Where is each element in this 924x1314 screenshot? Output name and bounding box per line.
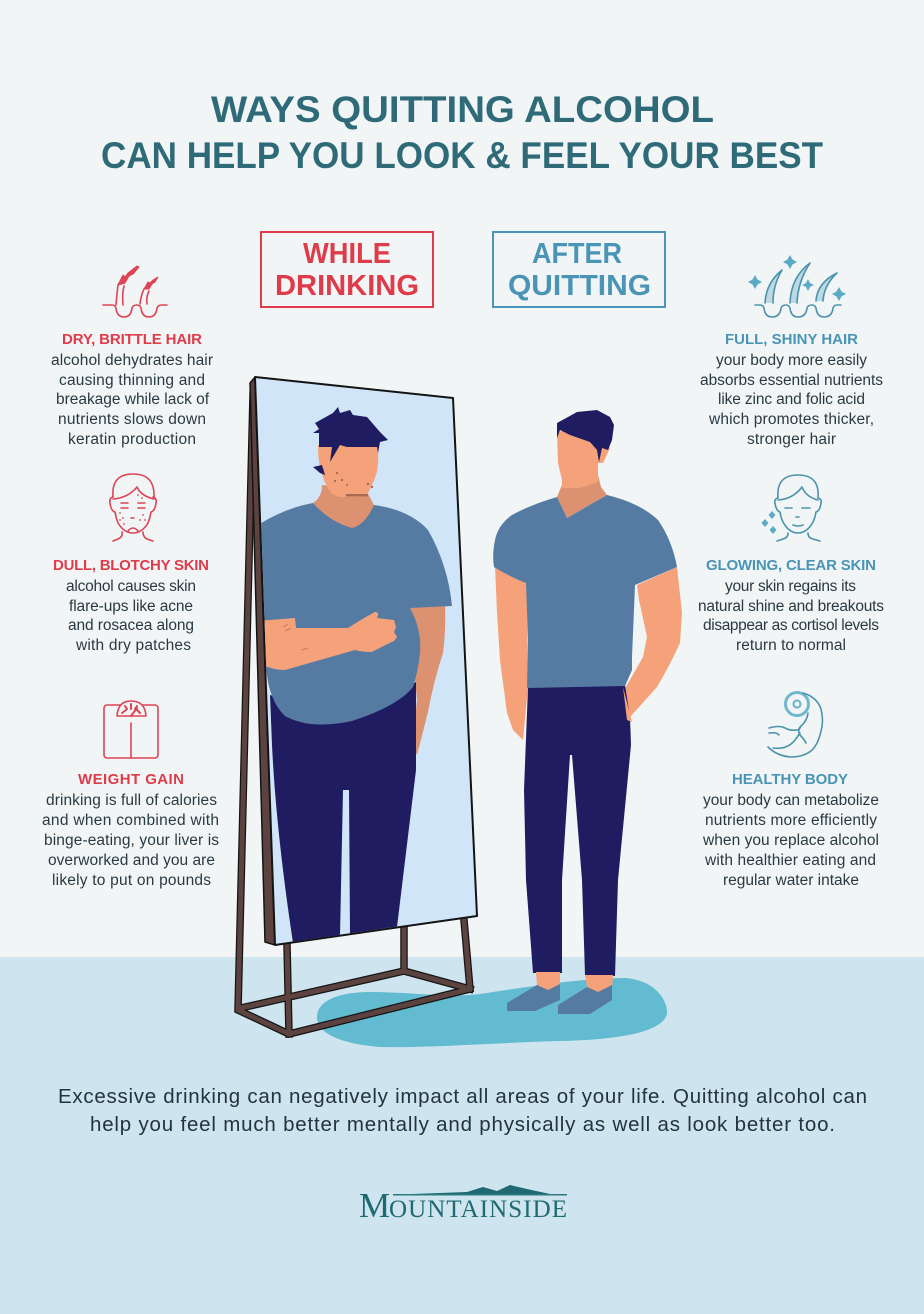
label: while drinking: [261, 232, 433, 307]
icon: scale: [104, 701, 158, 758]
logo: [359, 1185, 567, 1225]
text: shiny hair: [700, 331, 883, 448]
label: while drinking: WHILE: [303, 238, 391, 270]
bottom text: help you feel much better mentally and physically as well as look better too.: [90, 1113, 835, 1136]
text: dry hair: breakage while lack of: [56, 391, 210, 408]
shirt: [493, 495, 677, 688]
label: after quitting: QUITTING: [508, 270, 651, 302]
face: [318, 445, 378, 497]
title: CAN HELP YOU LOOK & FEEL YOUR BEST: [101, 135, 823, 176]
text: healthy body: your body can metabolize: [703, 792, 879, 809]
icon: muscle arm: [768, 692, 822, 757]
shadow puddle: [317, 978, 667, 1047]
neck: [557, 475, 607, 518]
mirror stand: [238, 395, 470, 1034]
after-quitting man: [493, 410, 682, 1014]
text: clear skin: GLOWING, CLEAR SKIN: [706, 557, 876, 574]
near arm: [258, 612, 397, 670]
text: weight gain: likely to put on pounds: [52, 872, 211, 889]
text: clear skin: disappear as cortisol levels: [703, 617, 879, 634]
shoes: [507, 984, 560, 1011]
text: shiny hair: your body more easily: [716, 352, 867, 369]
text: dull skin: and rosacea along: [68, 617, 194, 634]
text: shiny hair: stronger hair: [747, 431, 836, 448]
text: shiny hair: absorbs essential nutrients: [700, 372, 883, 389]
text: dry hair: causing thinning and: [59, 372, 205, 389]
text: dry hair: DRY, BRITTLE HAIR: [62, 331, 202, 348]
icon: brittle hair: [103, 266, 167, 317]
feet: [536, 972, 613, 992]
text: clear skin: return to normal: [736, 637, 846, 654]
face: [557, 425, 610, 488]
text: healthy body: [702, 771, 879, 889]
title: [101, 89, 823, 176]
pocket hand: [623, 687, 632, 722]
text: dry hair: alcohol dehydrates hair: [51, 352, 213, 369]
text: weight gain: binge-eating, your liver is: [44, 832, 219, 849]
stubble and blemishes: [334, 472, 373, 496]
text: dull skin: flare-ups like acne: [69, 598, 193, 615]
text: shiny hair: which promotes thicker,: [708, 411, 874, 428]
text: dry hair: keratin production: [68, 431, 196, 448]
text: dull skin: with dry patches: [75, 637, 191, 654]
hair: [557, 410, 614, 462]
text: weight gain: overworked and you are: [48, 852, 215, 869]
text: clear skin: your skin regains its: [725, 578, 856, 595]
label: after quitting: [493, 232, 665, 307]
text: dry hair: [51, 331, 213, 448]
text: clear skin: [698, 557, 884, 654]
floor: [0, 957, 924, 1314]
bottom text: Excessive drinking can negatively impact all areas of your life. Quitting alcohol can: [58, 1085, 867, 1108]
text: shiny hair: FULL, SHINY HAIR: [725, 331, 858, 348]
text: dull skin: DULL, BLOTCHY SKIN: [53, 557, 209, 574]
logo: M: [359, 1186, 390, 1225]
text: weight gain: [42, 771, 219, 889]
text: healthy body: with healthier eating and: [704, 852, 876, 869]
pants: [270, 682, 416, 943]
text: healthy body: HEALTHY BODY: [732, 771, 848, 788]
left arm: [495, 566, 528, 740]
mirror: [250, 377, 477, 945]
text: healthy body: when you replace alcohol: [702, 832, 879, 849]
logo: OUNTAINSIDE: [389, 1196, 567, 1223]
label: while drinking: DRINKING: [275, 270, 419, 302]
reflection: heavy man: [258, 407, 452, 943]
text: weight gain: WEIGHT GAIN: [78, 771, 184, 788]
far arm: [408, 605, 445, 755]
pants: [524, 685, 631, 976]
hair: [313, 407, 388, 462]
text: clear skin: natural shine and breakouts: [698, 598, 884, 615]
label: after quitting: AFTER: [532, 238, 622, 270]
text: dull skin: alcohol causes skin: [66, 578, 196, 595]
title: WAYS QUITTING ALCOHOL: [211, 89, 714, 130]
text: dry hair: nutrients slows down: [58, 411, 206, 428]
icon: blotchy face: [110, 474, 156, 541]
text: weight gain: drinking is full of calories: [46, 792, 217, 809]
shirt: [258, 503, 452, 725]
text: healthy body: regular water intake: [723, 872, 859, 889]
neck: [313, 485, 374, 528]
right arm: [623, 567, 682, 720]
bottom text: [58, 1085, 867, 1136]
text: shiny hair: like zinc and folic acid: [718, 391, 865, 408]
icon: shiny hair: [748, 255, 846, 317]
icon: clear face: [762, 475, 821, 541]
text: weight gain: and when combined with: [42, 812, 219, 829]
text: dull skin: [53, 557, 209, 654]
text: healthy body: nutrients more efficiently: [705, 812, 877, 829]
